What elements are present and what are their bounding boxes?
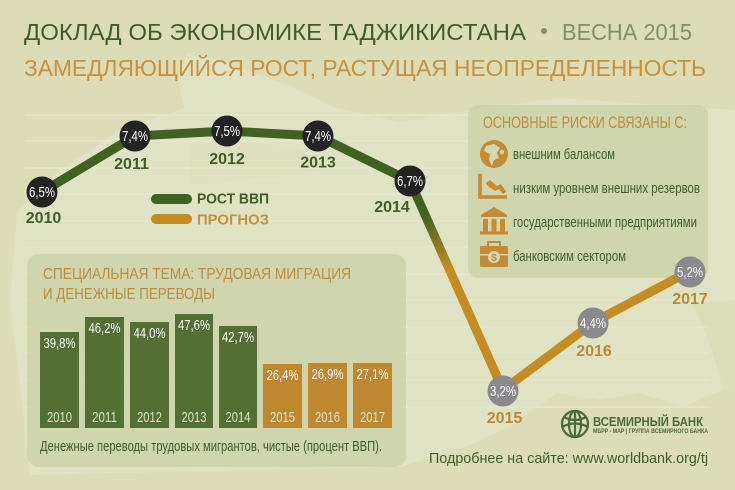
data points [26, 116, 706, 406]
title: ДОКЛАД ОБ ЭКОНОМИКЕ ТАДЖИКИСТАНА [24, 19, 527, 45]
bar chart: 26,9% [312, 366, 344, 383]
bar chart: 26,4% [266, 367, 298, 384]
bar chart: 2013 [182, 409, 206, 426]
year labels: 2015 [487, 410, 522, 427]
icon: briefcase with dollar: $ [491, 253, 497, 264]
legend: ПРОГНОЗ [197, 212, 269, 228]
bar chart: 2012 [137, 409, 162, 426]
subtitle: ЗАМЕДЛЯЮЩИЙСЯ РОСТ, РАСТУЩАЯ НЕОПРЕДЕЛЕННОСТЬ [24, 54, 706, 81]
bar chart: 2014 [226, 409, 250, 426]
icon: globe logo [562, 411, 588, 437]
bar chart: 2016 [315, 409, 340, 426]
logo: World Bank [562, 411, 709, 437]
bar chart: 42,7% [222, 329, 254, 346]
bar chart: 2015 [270, 409, 295, 426]
logo: World Bank: ВСЕМИРНЫЙ БАНК [593, 414, 703, 429]
panel heading [43, 266, 351, 303]
year labels: 2012 [209, 151, 245, 168]
chart caption: Денежные переводы трудовых мигрантов, чистые (процент ВВП). [40, 439, 382, 455]
year labels: 2016 [576, 343, 612, 360]
data points: 5,2% [677, 264, 703, 281]
bar chart: 47,6% [178, 317, 210, 334]
data points: 7,4% [122, 128, 148, 145]
bar chart: 2017 [360, 409, 385, 426]
year labels: 2010 [26, 210, 61, 227]
actual line [42, 131, 410, 192]
year labels [26, 151, 708, 427]
legend: РОСТ ВВП [197, 192, 269, 208]
year labels: 2011 [114, 156, 149, 173]
line chart: GDP growth [26, 116, 708, 427]
website link: Подробнее на сайте: www.worldbank.org/tj [429, 450, 708, 467]
year labels: 2017 [672, 291, 708, 308]
title: ВЕСНА 2015 [562, 19, 692, 45]
bar chart: 46,2% [88, 320, 120, 337]
year labels: 2013 [300, 154, 336, 172]
icon: bank building [480, 207, 508, 234]
transition line [410, 181, 503, 390]
bar chart: 44,0% [134, 325, 166, 342]
data points: 4,4% [580, 315, 606, 332]
bar chart: 2010 [47, 409, 72, 426]
icon: falling chart [480, 174, 507, 197]
logo: World Bank: МБРР - МАР | ГРУППА ВСЕМИРНОГО БАНКА [593, 429, 709, 435]
data points: 7,4% [305, 128, 331, 145]
panel heading: И ДЕНЕЖНЫЕ ПЕРЕВОДЫ [43, 286, 215, 303]
data points: 6,7% [397, 173, 423, 190]
bar chart: 39,8% [44, 335, 76, 352]
bar chart: 2011 [92, 409, 117, 426]
bar chart: 27,1% [356, 366, 388, 383]
data points: 3,2% [490, 383, 516, 400]
panel heading: СПЕЦИАЛЬНАЯ ТЕМА: ТРУДОВАЯ МИГРАЦИЯ [43, 266, 351, 283]
icon: briefcase with dollar [480, 242, 508, 267]
legend [151, 192, 269, 228]
panel: remittances [27, 254, 406, 467]
panel: main risks [468, 105, 708, 278]
bar chart [40, 314, 392, 428]
forecast line [503, 271, 690, 390]
icon: globe [480, 140, 508, 168]
risk text: external balance: внешним балансом [513, 147, 615, 163]
data points: 7,5% [214, 123, 240, 140]
year labels: 2014 [374, 199, 410, 216]
risk text: banking sector: банковским сектором [513, 249, 626, 265]
data points: 6,5% [29, 184, 55, 201]
